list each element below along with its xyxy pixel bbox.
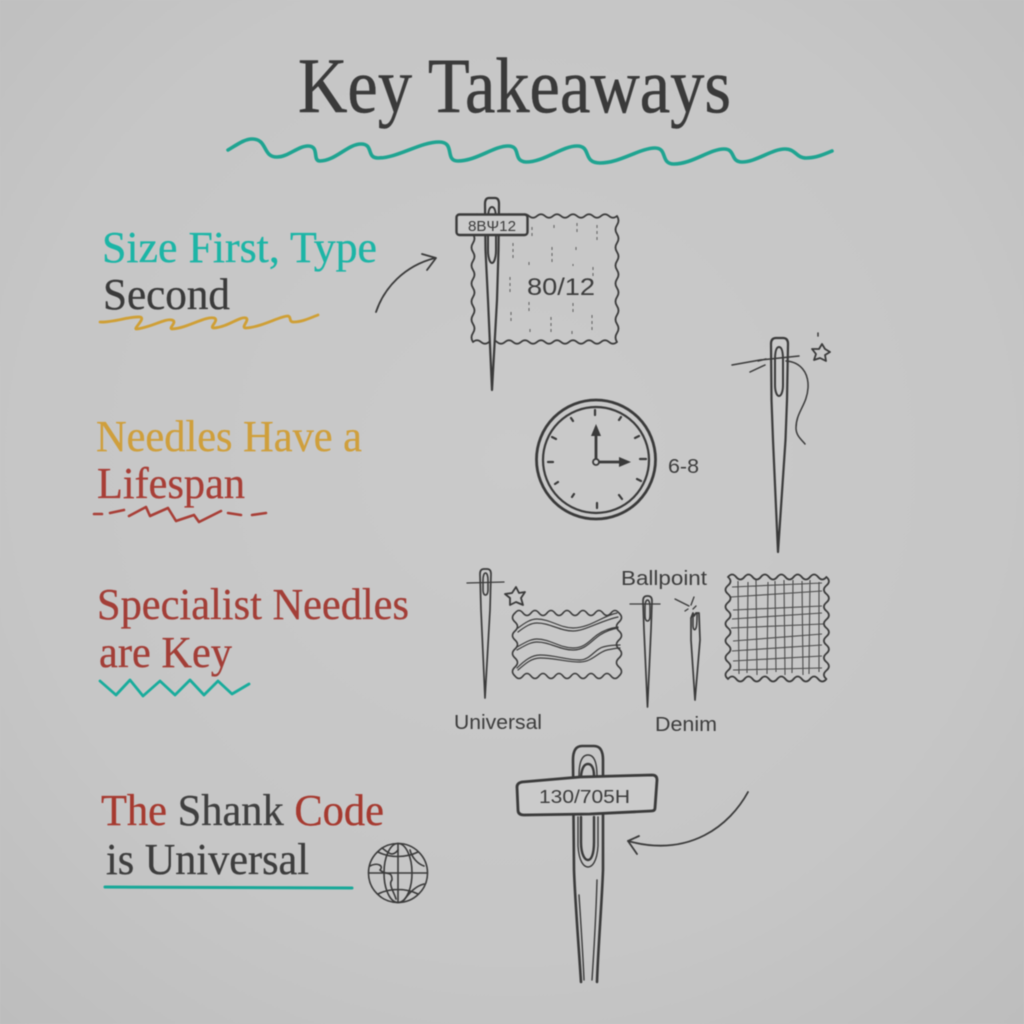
takeaway 1 heading: Size First, Type	[102, 223, 377, 272]
clock hands	[596, 428, 625, 462]
takeaway 2 heading: Needles Have a	[96, 412, 362, 461]
arrow to shank code	[628, 792, 748, 854]
needle body	[573, 746, 603, 982]
needle size label	[456, 214, 528, 235]
takeaway 3 underline	[100, 680, 249, 696]
fabric swatch	[472, 214, 618, 344]
icon: universal needle	[467, 569, 504, 698]
icon: ballpoint needle	[630, 596, 660, 707]
takeaway 3 heading: are Key	[99, 628, 232, 677]
needle	[485, 198, 499, 390]
clock label: 6-8	[668, 456, 699, 478]
takeaway 2 heading	[96, 412, 362, 508]
takeaway 4 heading	[101, 786, 384, 884]
icon: needle and fabric swatch 80/12	[456, 198, 618, 390]
icon: large needle with shank code: 130/705H	[539, 786, 630, 807]
takeaway 1 underline	[100, 315, 318, 329]
icon: denim needle with sparks	[675, 597, 700, 700]
takeaway 2 underline	[94, 507, 266, 522]
swatch size text: 80/12	[527, 274, 595, 301]
icon: clock	[536, 400, 656, 519]
clock ticks	[548, 410, 646, 508]
star	[812, 344, 830, 361]
shank label	[517, 775, 657, 815]
icon: wavy stretch fabric	[512, 610, 622, 678]
takeaway 3 heading: Specialist Needles	[97, 580, 409, 629]
icon: denim woven fabric	[726, 574, 829, 682]
takeaway 1 heading	[102, 223, 377, 319]
denim label: Denim	[655, 714, 717, 736]
takeaway 4 heading: is Universal	[106, 835, 309, 884]
takeaway 4 underline	[105, 887, 352, 888]
icon: star	[505, 587, 525, 605]
thread	[732, 356, 808, 444]
icon: globe	[368, 844, 428, 902]
stitch marks	[510, 223, 597, 334]
icon: needle and fabric swatch 80/12: 8BΨ12	[468, 219, 516, 235]
title wavy underline	[228, 139, 832, 164]
takeaway 1 heading: Second	[103, 270, 230, 319]
icon: large needle with shank code	[517, 746, 657, 982]
takeaway 2 heading: Lifespan	[97, 459, 245, 508]
takeaway 3 heading	[97, 580, 409, 677]
title: Key Takeaways	[298, 42, 731, 129]
ballpoint label: Ballpoint	[621, 568, 707, 590]
takeaway 4 heading: The Shank Code	[101, 786, 384, 835]
icon: threaded needle with star	[732, 333, 830, 552]
universal label: Universal	[454, 712, 542, 734]
arrow to needle size	[376, 254, 436, 312]
